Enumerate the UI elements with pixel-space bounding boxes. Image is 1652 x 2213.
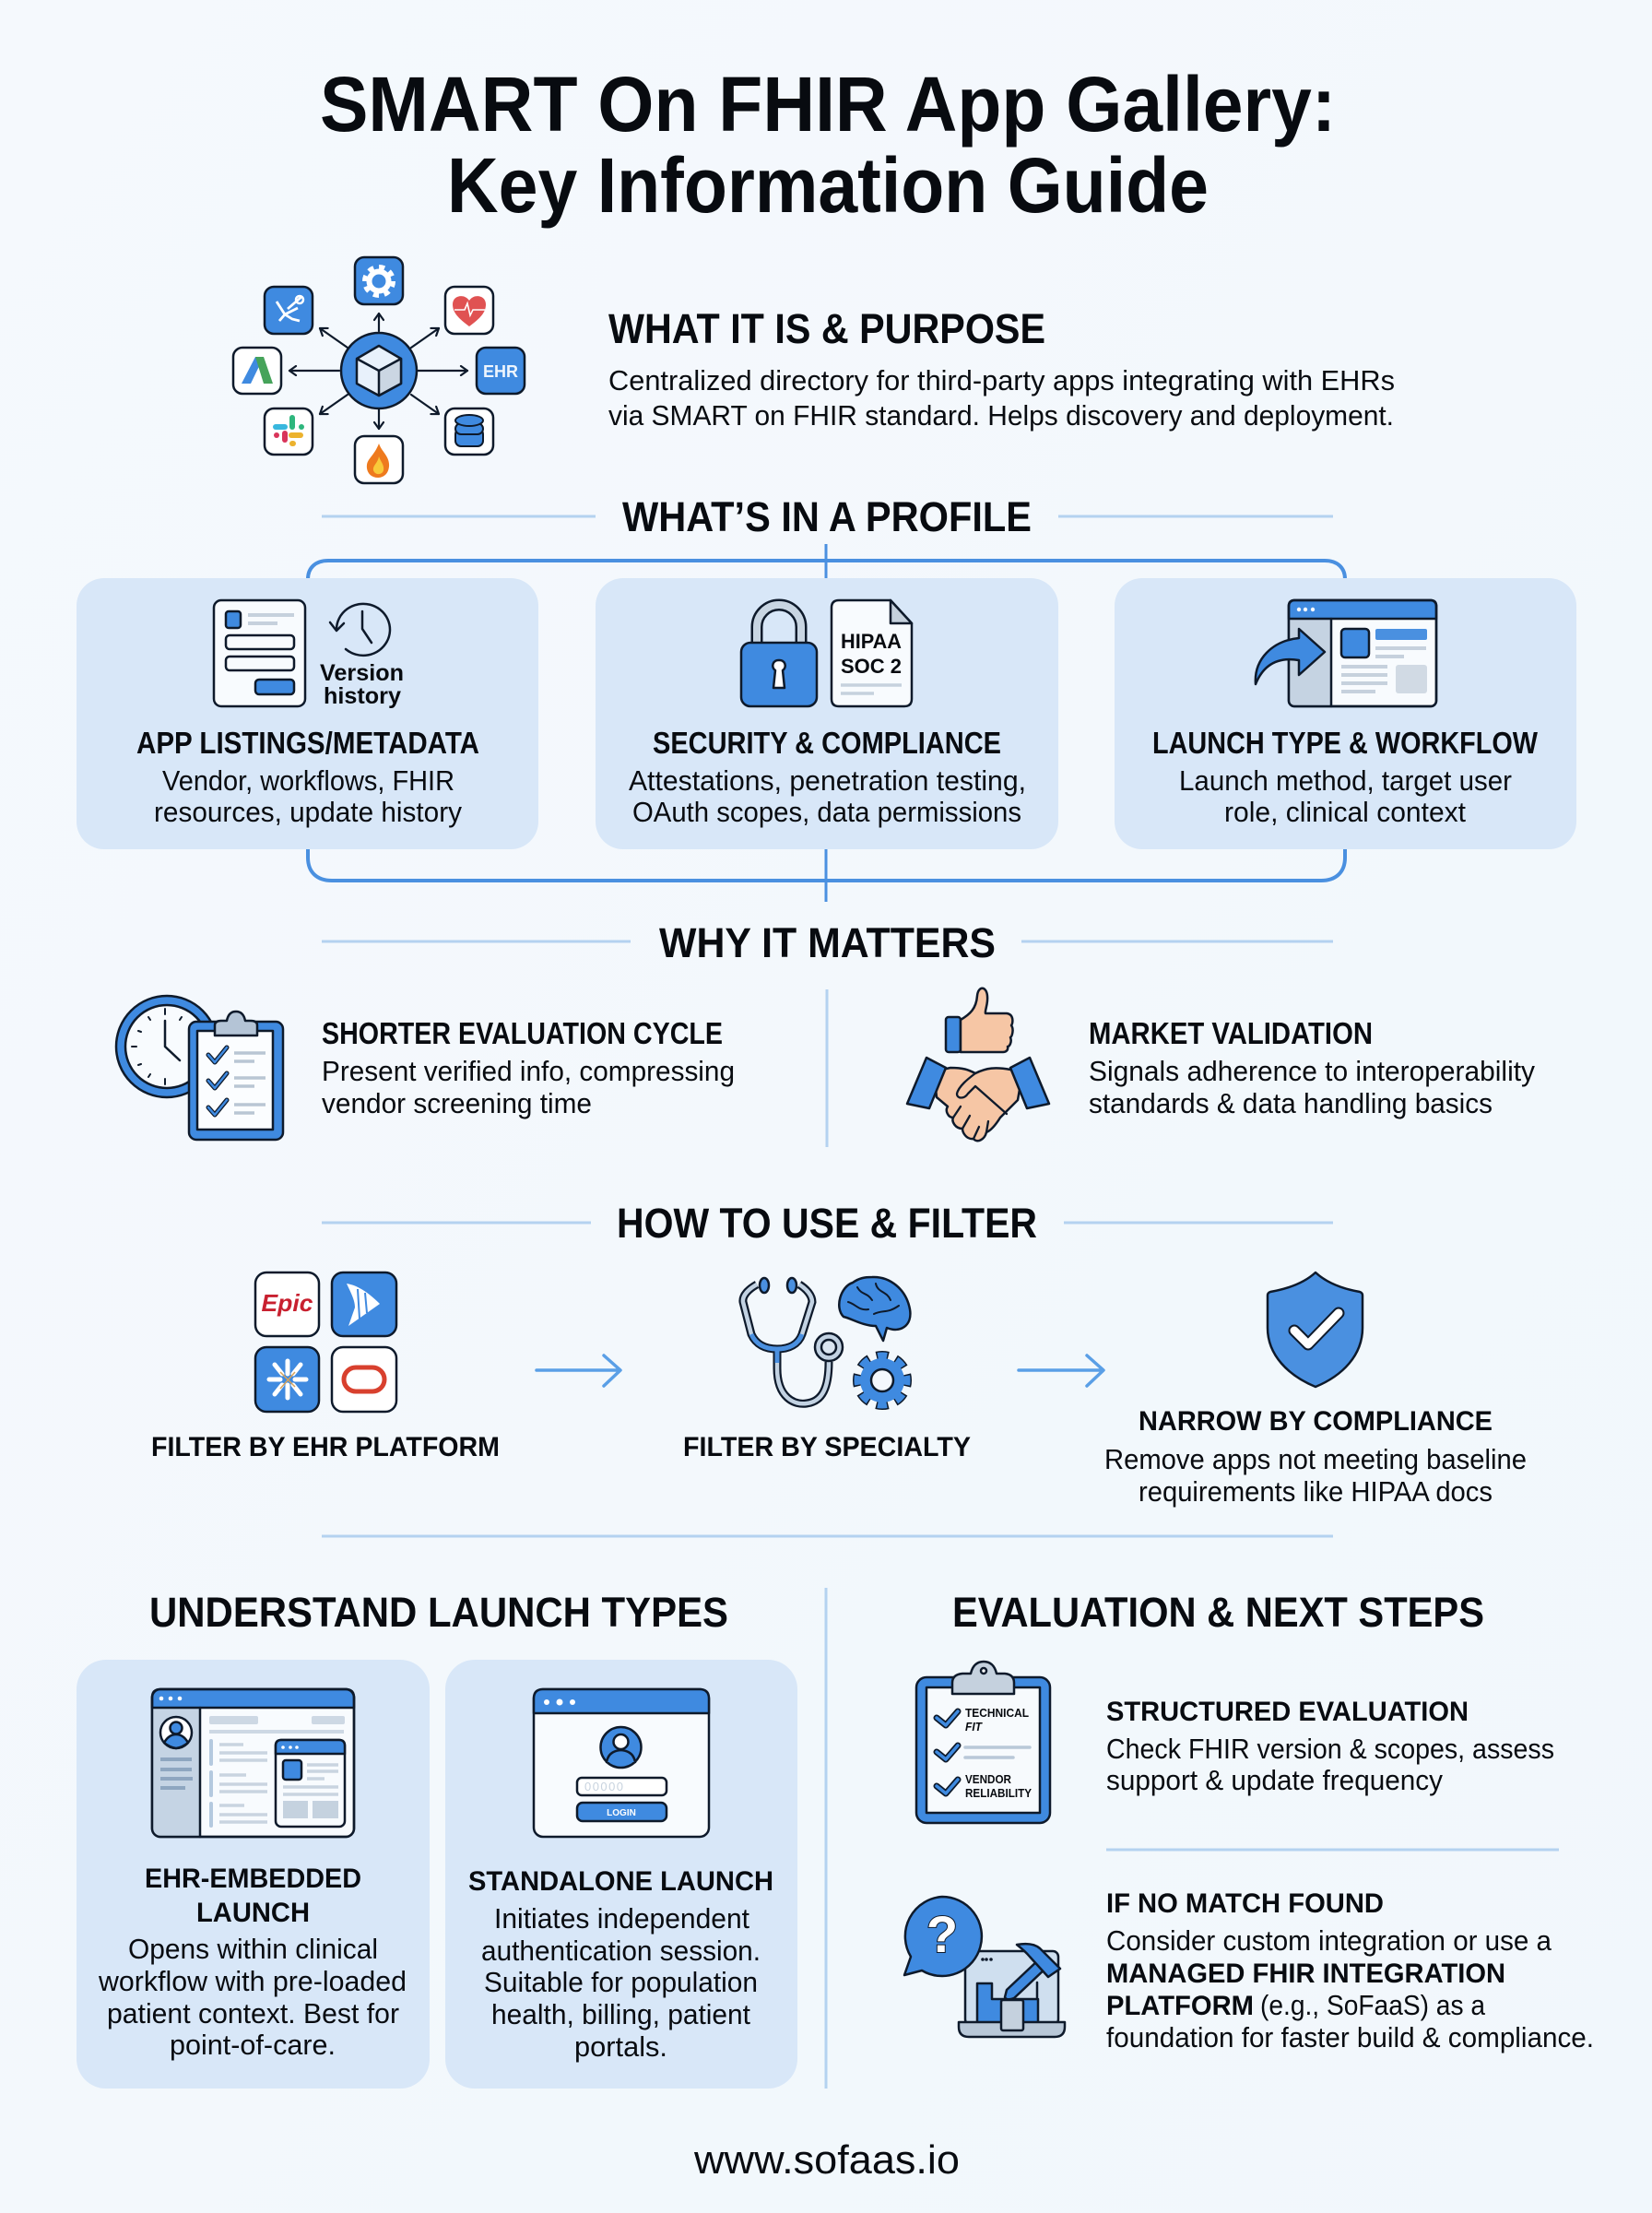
icon: evaluation clipboard [916, 1662, 1050, 1823]
text block: narrow by compliance: NARROW BY COMPLIANCE [1139, 1406, 1493, 1437]
text block: market validation: Signals adherence to interoperability [1089, 1055, 1535, 1087]
icon: shield with check [1268, 1272, 1363, 1387]
text block: shorter evaluation cycle: Present verified info, compressing [322, 1055, 735, 1087]
text block: if no match found: MANAGED FHIR INTEGRATION [1106, 1959, 1505, 1989]
icon: app hub with connected tiles [233, 257, 525, 483]
card description: OAuth scopes, data permissions [632, 796, 1021, 828]
text block: purpose description: via SMART on FHIR standard. Helps discovery and deployment. [608, 399, 1394, 432]
icon: embedded app browser [152, 1689, 354, 1837]
text block: market validation: standards & data handling basics [1089, 1087, 1493, 1119]
heading: evaluation and next steps: EVALUATION & NEXT STEPS [952, 1589, 1484, 1636]
bracket connector around profile cards [308, 544, 1345, 902]
text block: if no match found: IF NO MATCH FOUND [1106, 1888, 1384, 1919]
text block: structured evaluation [1106, 1697, 1554, 1796]
card title [145, 1864, 361, 1928]
icon: version history clock [330, 604, 390, 656]
text block: purpose description [608, 364, 1395, 432]
icon: EHR platform logos: Epic [262, 1289, 313, 1317]
card title: STANDALONE LAUNCH [468, 1866, 773, 1897]
panel: standalone launch [445, 1660, 797, 2089]
icon: stethoscope, brain and gear [743, 1277, 913, 1411]
icon: evaluation clipboard: FIT [965, 1721, 983, 1734]
text block: shorter evaluation cycle: vendor screening time [322, 1087, 592, 1119]
icon: evaluation clipboard: RELIABILITY [965, 1787, 1032, 1800]
title [320, 61, 1336, 229]
text block: purpose description: Centralized directory for third-party apps integrating with EHRs [608, 364, 1395, 396]
panel: EHR-embedded launch [77, 1660, 430, 2089]
panel: app listings [77, 578, 538, 849]
text block: structured evaluation: support & update frequency [1106, 1764, 1443, 1796]
card description [98, 1933, 407, 2061]
icon: EHR platform logos [255, 1272, 396, 1412]
panel: security and compliance [596, 578, 1058, 849]
card description: health, billing, patient [491, 1998, 750, 2030]
label: version history: history [324, 683, 401, 709]
text block: if no match found: PLATFORM [1106, 1991, 1254, 2021]
card title: LAUNCH [196, 1898, 310, 1928]
card title: EHR-EMBEDDED [145, 1864, 361, 1894]
card title: APP LISTINGS/METADATA [136, 726, 479, 760]
card description: Opens within clinical [128, 1933, 378, 1965]
text block: structured evaluation: STRUCTURED EVALUATION [1106, 1697, 1469, 1727]
card description: Suitable for population [484, 1966, 758, 1998]
card description [481, 1902, 761, 2063]
footer: website: www.sofaas.io [693, 2137, 960, 2183]
icon: compliance document [832, 600, 912, 706]
icon: login browser: 00000 [584, 1780, 623, 1793]
icon: padlock [741, 605, 817, 706]
text block: narrow by compliance [1104, 1406, 1527, 1508]
card description: patient context. Best for [107, 1997, 399, 2030]
title: Key Information Guide [447, 142, 1209, 229]
text block: structured evaluation: Check FHIR version & scopes, assess [1106, 1733, 1554, 1765]
card description: workflow with pre-loaded [98, 1965, 407, 1997]
text block: market validation [1089, 1016, 1535, 1119]
card description: Attestations, penetration testing, [629, 764, 1026, 797]
icon: login browser: LOGIN [607, 1808, 636, 1818]
panel: launch type and workflow [1115, 578, 1576, 849]
icon: clock with clipboard [116, 996, 283, 1140]
text block: narrow by compliance: Remove apps not meeting baseline [1104, 1443, 1527, 1475]
icon: question bubble with laptop and hammer: ? [926, 1905, 958, 1963]
card description [629, 764, 1026, 828]
icon: thumbs up and handshake [907, 988, 1049, 1141]
text block: market validation: MARKET VALIDATION [1089, 1016, 1373, 1050]
card description: resources, update history [154, 796, 462, 828]
text block: narrow by compliance: requirements like HIPAA docs [1139, 1475, 1493, 1508]
heading: why it matters: WHY IT MATTERS [659, 919, 996, 966]
icon: browser window with arrow [1256, 600, 1436, 706]
icon: evaluation clipboard: TECHNICAL [965, 1707, 1029, 1720]
text block: shorter evaluation cycle [322, 1016, 735, 1119]
icon: listing document [214, 600, 305, 706]
label: version history: Version [320, 660, 404, 686]
card description: authentication session. [481, 1935, 761, 1967]
text block: if no match found [1106, 1888, 1594, 2053]
heading: how to use and filter: HOW TO USE & FILTER [617, 1200, 1037, 1247]
label: filter by EHR platform: FILTER BY EHR PLATFORM [151, 1432, 500, 1462]
icon: login browser [534, 1689, 709, 1837]
text block: if no match found: foundation for faster build & compliance. [1106, 2021, 1594, 2053]
icon: compliance document: SOC 2 [841, 655, 902, 678]
text block: if no match found: Consider custom integration or use a [1106, 1924, 1552, 1957]
label: filter by specialty: FILTER BY SPECIALTY [683, 1432, 971, 1462]
card description: Launch method, target user [1179, 764, 1512, 797]
title: SMART On FHIR App Gallery: [320, 61, 1336, 148]
arrow [537, 1355, 620, 1386]
card description [154, 764, 462, 828]
label: version history [320, 660, 404, 709]
card description: Vendor, workflows, FHIR [162, 764, 454, 797]
card description: role, clinical context [1224, 796, 1466, 828]
card description: portals. [574, 2030, 667, 2063]
icon: question bubble with laptop and hammer [904, 1897, 1065, 2037]
heading: what's in a profile: WHAT’S IN A PROFILE [622, 493, 1032, 540]
arrow [1019, 1355, 1103, 1386]
text block: shorter evaluation cycle: SHORTER EVALUATION CYCLE [322, 1016, 723, 1050]
heading: understand launch types: UNDERSTAND LAUNCH TYPES [149, 1589, 728, 1636]
icon: compliance document: HIPAA [841, 630, 902, 653]
card title: SECURITY & COMPLIANCE [653, 726, 1001, 760]
heading: what it is and purpose: WHAT IT IS & PURPOSE [608, 305, 1045, 352]
icon: app hub with connected tiles: EHR [483, 362, 518, 381]
card description: Initiates independent [494, 1902, 749, 1935]
text block: if no match found: (e.g., SoFaaS) as a [1260, 1989, 1486, 2021]
card description: point-of-care. [170, 2029, 336, 2061]
icon: evaluation clipboard: VENDOR [965, 1773, 1011, 1786]
card description [1179, 764, 1512, 828]
card title: LAUNCH TYPE & WORKFLOW [1152, 726, 1539, 760]
